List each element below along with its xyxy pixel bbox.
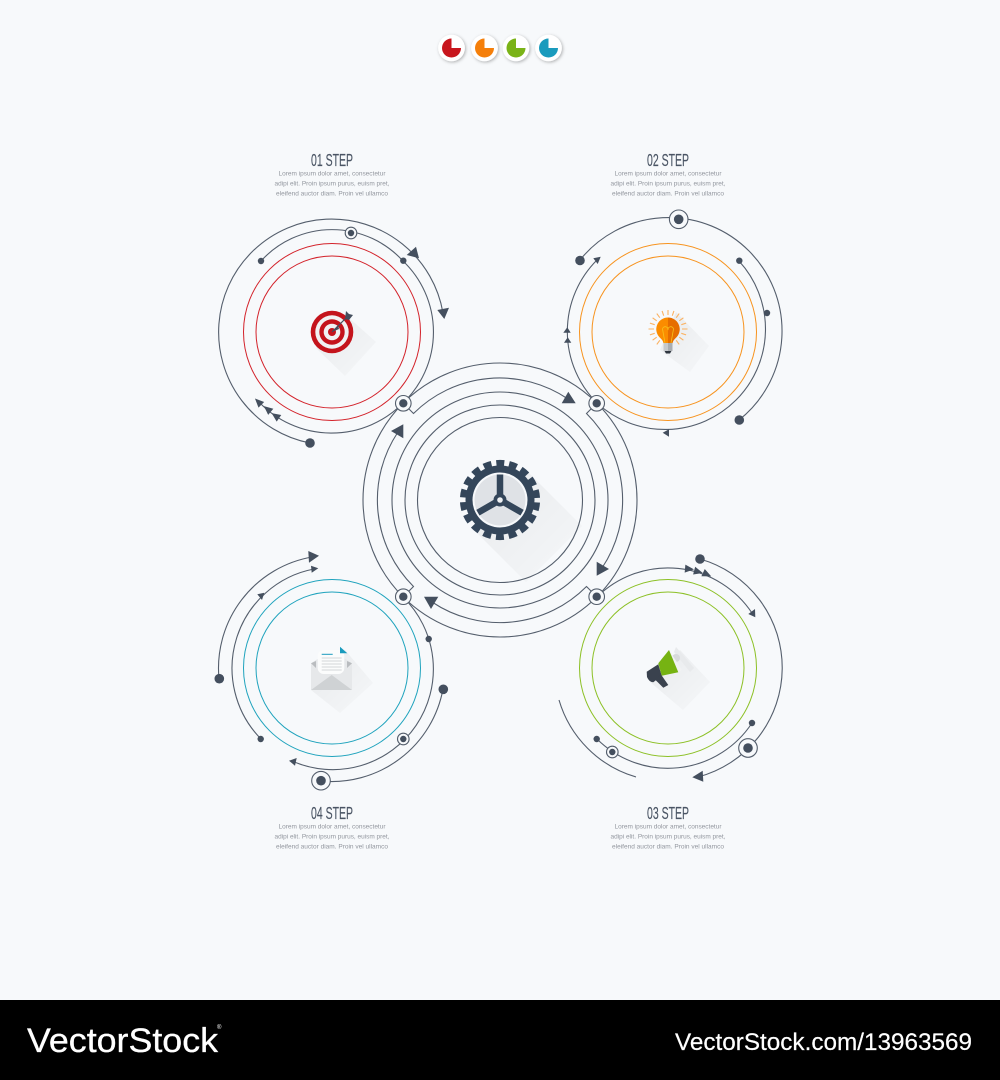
step 02 text: Lorem ipsum dolor amet, consectetur bbox=[614, 172, 722, 178]
step 04 text: 04 STEP bbox=[311, 803, 353, 823]
step 04 text bbox=[274, 803, 390, 850]
step 04 text: adipi elit. Proin ipsum purus, euism pret, bbox=[274, 834, 390, 840]
icon: gear bbox=[463, 463, 582, 582]
panel: step 03 circle bbox=[559, 554, 782, 782]
step 01 text: eleifend auctor diam. Proin vel ullamco bbox=[276, 192, 389, 198]
step 01 text: adipi elit. Proin ipsum purus, euism pret, bbox=[274, 182, 390, 188]
step 01 text: 01 STEP bbox=[311, 150, 353, 170]
icon: light bulb bbox=[648, 310, 709, 372]
footer watermark band bbox=[0, 1000, 1000, 1080]
step 04 text: Lorem ipsum dolor amet, consectetur bbox=[278, 824, 386, 830]
step 03 text: 03 STEP bbox=[647, 803, 689, 823]
panel: step 02 circle bbox=[563, 210, 782, 437]
step 04 text: eleifend auctor diam. Proin vel ullamco bbox=[276, 844, 389, 850]
icon: target bbox=[311, 311, 376, 376]
step 02 text: adipi elit. Proin ipsum purus, euism pret, bbox=[610, 182, 726, 188]
footer watermark band: ® bbox=[217, 1024, 222, 1031]
panel: step 04 circle bbox=[214, 551, 448, 790]
icon: megaphone bbox=[647, 647, 710, 710]
step 03 text bbox=[610, 803, 726, 850]
panel: central rings bbox=[363, 363, 637, 637]
panel: step 01 circle bbox=[219, 219, 449, 448]
step 01 text: Lorem ipsum dolor amet, consectetur bbox=[278, 172, 386, 178]
icon: envelope bbox=[311, 647, 373, 713]
footer watermark band: VectorStock.com/13963569 bbox=[675, 1029, 972, 1056]
step 02 text: eleifend auctor diam. Proin vel ullamco bbox=[612, 192, 725, 198]
step 01 text bbox=[274, 150, 390, 198]
step 03 text: Lorem ipsum dolor amet, consectetur bbox=[614, 824, 722, 830]
legend: four pie icons bbox=[438, 35, 562, 61]
step 02 text bbox=[610, 150, 726, 198]
step 02 text: 02 STEP bbox=[647, 150, 689, 170]
step 03 text: eleifend auctor diam. Proin vel ullamco bbox=[612, 844, 725, 850]
step 03 text: adipi elit. Proin ipsum purus, euism pret, bbox=[610, 834, 726, 840]
connector nodes bbox=[396, 396, 604, 604]
footer watermark band: VectorStock bbox=[27, 1022, 219, 1060]
